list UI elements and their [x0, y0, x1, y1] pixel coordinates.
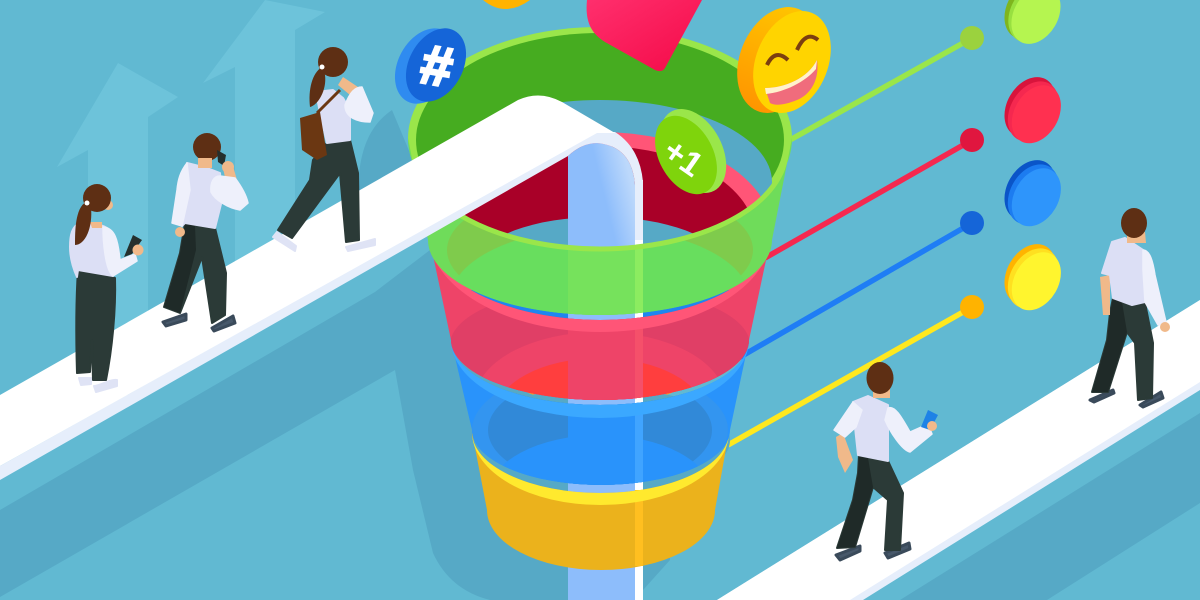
- icon: yellow coin top: [483, 0, 530, 9]
- person: woman with backpack: [273, 47, 375, 251]
- person: woman with phone: [70, 184, 144, 392]
- person: man on phone: [163, 133, 248, 331]
- left walkway: [0, 95, 643, 480]
- funnel tier: green: [408, 138, 792, 315]
- background arrows: [57, 0, 325, 350]
- icon: hash coin: [382, 18, 478, 114]
- connector lines: [728, 26, 984, 445]
- icon: hash coin: #: [416, 32, 458, 99]
- funnel tier: red: [434, 258, 766, 400]
- right walkway: [717, 300, 1200, 600]
- funnel column: [568, 143, 643, 600]
- icon: smile coin: [722, 0, 845, 125]
- person: man walking right: [1090, 208, 1170, 407]
- funnel tier: yellow: [472, 432, 729, 570]
- icon: heart: [587, 0, 702, 71]
- legend coins: [993, 0, 1073, 319]
- person: man with phone: [834, 362, 938, 560]
- icon: plus one coin: [642, 98, 740, 205]
- icon: plus one coin: +1: [656, 131, 710, 185]
- funnel tier: blue: [451, 344, 749, 485]
- funnel back: [408, 27, 792, 493]
